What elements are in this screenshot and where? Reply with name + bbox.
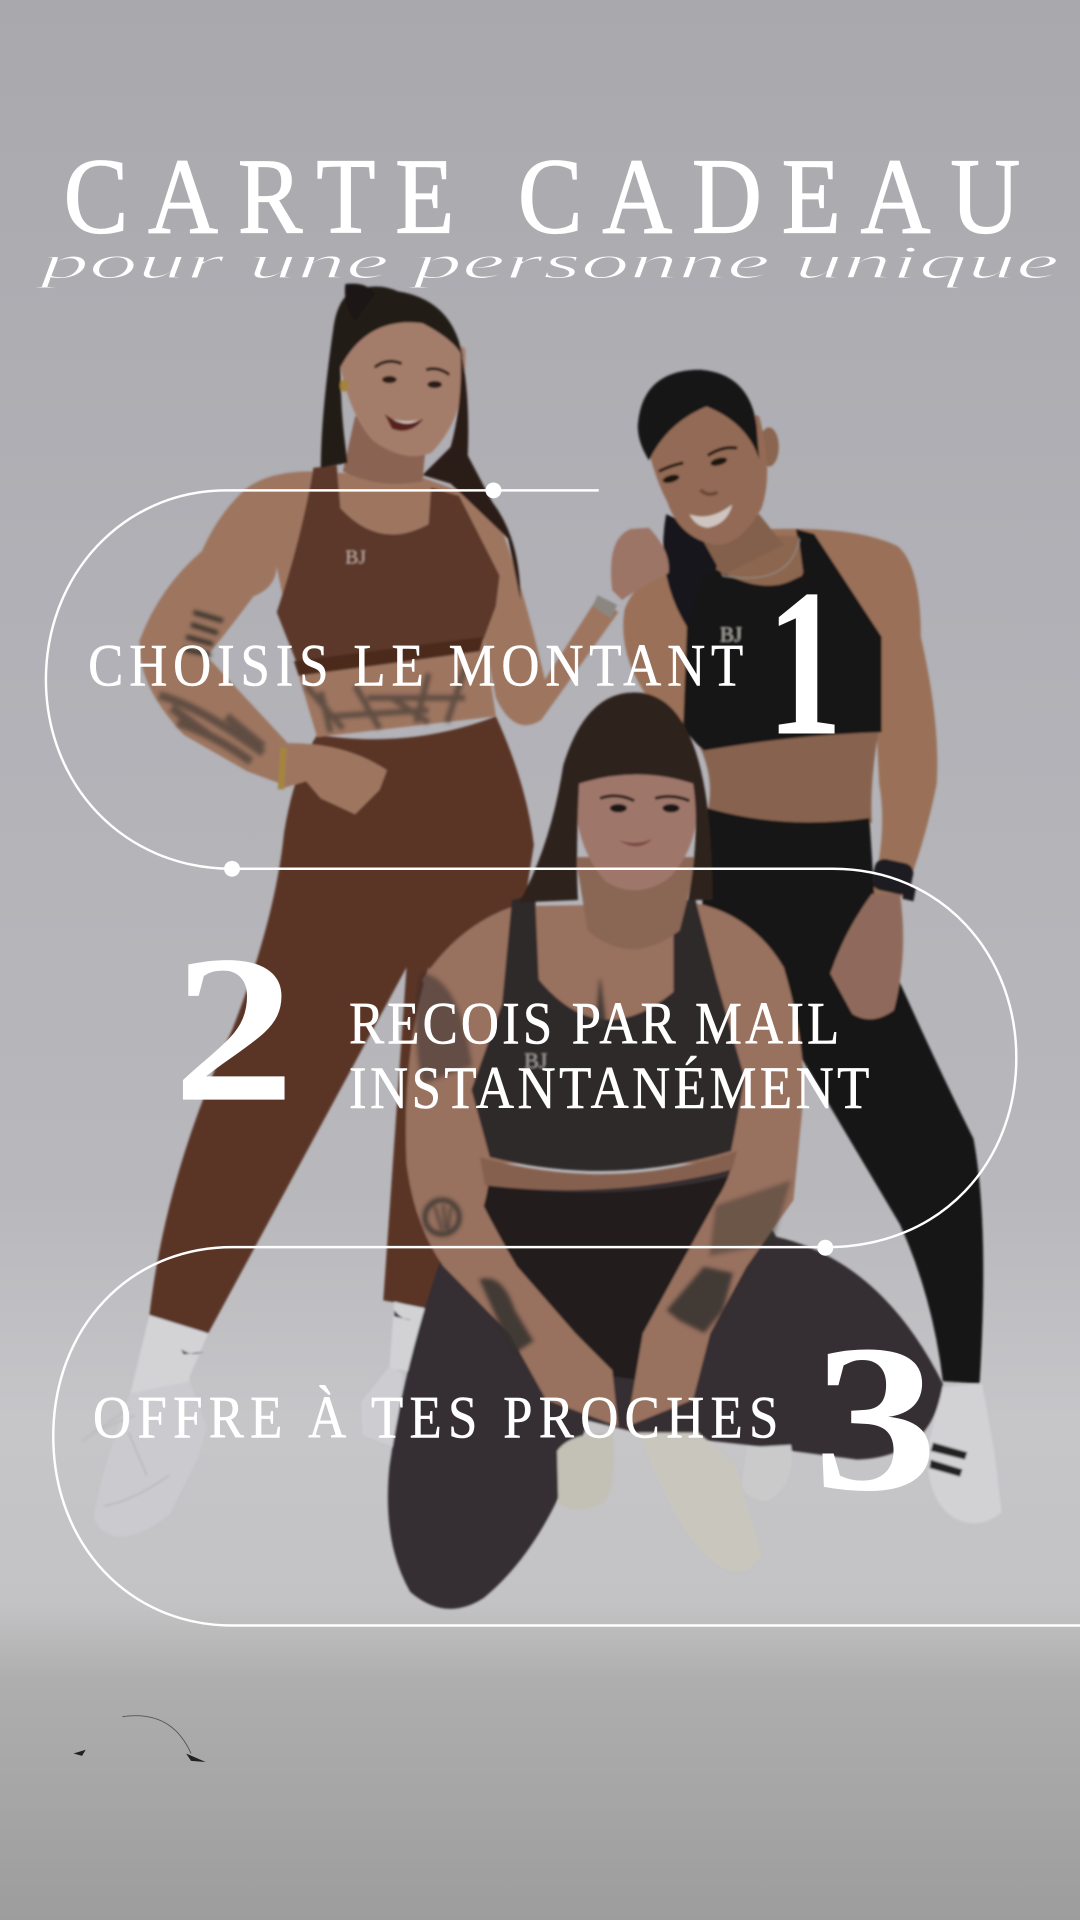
subtitle: pour une personne unique xyxy=(34,238,1059,289)
step 2 number: 2 xyxy=(173,912,295,1146)
step 3 label: OFFRE À TES PROCHES xyxy=(93,1386,778,1451)
woman front in grey xyxy=(388,692,1002,1609)
photo: three women posing xyxy=(82,284,1002,1609)
tattoos on front woman xyxy=(416,973,790,1353)
step 1 label: CHOISIS LE MONTANT xyxy=(88,634,743,700)
tattoos on woman left xyxy=(159,612,465,762)
woman right in black: BJ xyxy=(720,623,742,647)
woman front in grey: BJ xyxy=(524,1048,548,1073)
title: CARTE CADEAU xyxy=(64,138,1020,257)
woman left in brown xyxy=(82,284,669,1537)
step 2 label xyxy=(349,991,869,1122)
step 2 label: INSTANTANÉMENT xyxy=(349,1056,869,1122)
step 2 label: RECOIS PAR MAIL xyxy=(349,991,839,1057)
step 3 number: 3 xyxy=(813,1301,938,1535)
woman left in brown: BJ xyxy=(345,547,366,568)
connector line with three pill curves xyxy=(46,482,1080,1626)
step 1 number: 1 xyxy=(767,545,842,779)
woman right in black xyxy=(623,370,983,1384)
